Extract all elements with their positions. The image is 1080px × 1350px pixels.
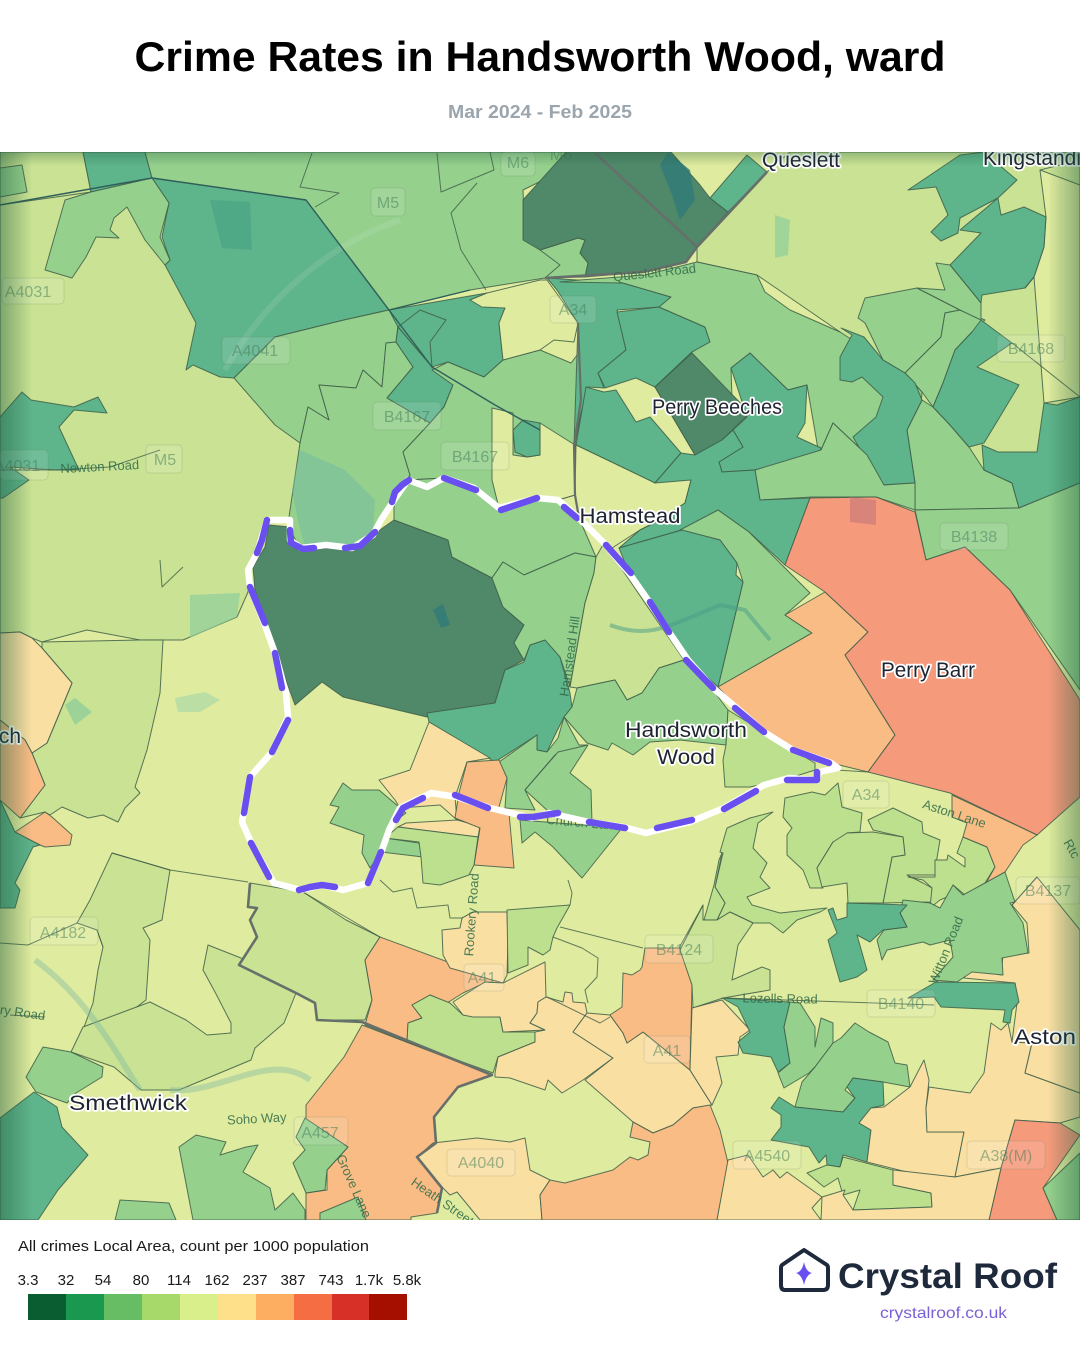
road number labels: B4137 [1025,883,1071,900]
place names: Wood [657,746,715,769]
road names: Hamstead Hill [556,615,583,697]
road names: Heath Street [408,1174,477,1229]
road number labels: B4124 [656,942,702,959]
road number labels: A41 [468,970,496,987]
legend values: 54 [95,1272,111,1289]
legend values: 80 [133,1272,149,1289]
legend [18,1238,422,1320]
legend colour bar [28,1294,407,1320]
subtitle: date range: Mar 2024 - Feb 2025 [448,102,632,122]
legend values: 162 [204,1272,230,1289]
place names: Hamstead [580,505,680,528]
road names: Witton Road [925,914,966,986]
road number labels: A41 [653,1043,681,1060]
road names: Queslett Road [612,261,697,284]
place names: Aston [1014,1026,1076,1049]
road names: Newton Road [60,457,139,476]
road number labels: A34 [559,302,587,319]
road number badges [0,152,1080,1176]
ward boundary: white casing [242,478,838,890]
icon: house with star [781,1250,828,1290]
legend values [18,1272,422,1289]
place names: Kingstandi [983,147,1080,170]
map edge vignette [0,152,1080,1220]
place names: Perry Barr [881,659,975,682]
place names: Perry Beeches [652,396,782,419]
road number labels: B4138 [951,529,997,546]
road number labels: B4167 [452,449,498,466]
road number labels: B4167 [384,409,430,426]
road number labels: A34 [852,787,880,804]
place names: Queslett [762,149,840,172]
website url: crystalroof.co.uk [880,1305,1008,1322]
road names: ry Road [0,1002,46,1023]
road number labels: M6 [550,147,572,164]
legend values: 743 [318,1272,344,1289]
road number labels: A38(M) [980,1148,1032,1165]
road names: Rookery Road [461,873,482,957]
legend values: 32 [58,1272,74,1289]
road number labels [0,147,1071,1172]
place names: Handsworth [625,719,747,742]
thin area outlines [0,152,1080,1023]
title: Crime Rates in Handsworth Wood, ward [134,33,945,80]
legend values: 237 [242,1272,268,1289]
legend title: All crimes Local Area, count per 1000 population [18,1238,369,1255]
road names: Aston Lane [921,796,988,831]
road number labels: M5 [154,452,176,469]
road number labels: A4031 [5,284,51,301]
legend values: 5.8k [393,1272,422,1289]
road number labels: A4182 [40,925,86,942]
road names: Lozells Road [742,990,818,1007]
thick administrative boundaries [0,153,767,1213]
road number labels: A4040 [458,1155,504,1172]
choropleth areas [0,152,1080,1220]
place names [0,147,1080,1115]
legend values: 114 [167,1272,191,1289]
legend values: 1.7k [355,1272,384,1289]
place names: Smethwick [69,1092,188,1115]
logo: Crystal Roof [781,1250,1057,1322]
road names: Church Lane [546,812,621,833]
road number labels: M6 [507,155,529,172]
road number labels: B4140 [878,996,924,1013]
road number labels: A4540 [744,1148,790,1165]
legend values: 387 [280,1272,306,1289]
legend values: 3.3 [18,1272,38,1289]
ward boundary: purple dashes [244,478,829,890]
road names: Grove Lane [333,1152,375,1220]
road number labels: B4168 [1008,341,1054,358]
road number labels: M5 [377,195,399,212]
road names: Soho Way [227,1109,287,1128]
road number labels: A457 [301,1125,339,1142]
road names [0,261,1080,1229]
water and parks [35,152,876,1090]
logo wordmark: Crystal Roof [838,1257,1057,1296]
road number labels: A4041 [232,343,278,360]
